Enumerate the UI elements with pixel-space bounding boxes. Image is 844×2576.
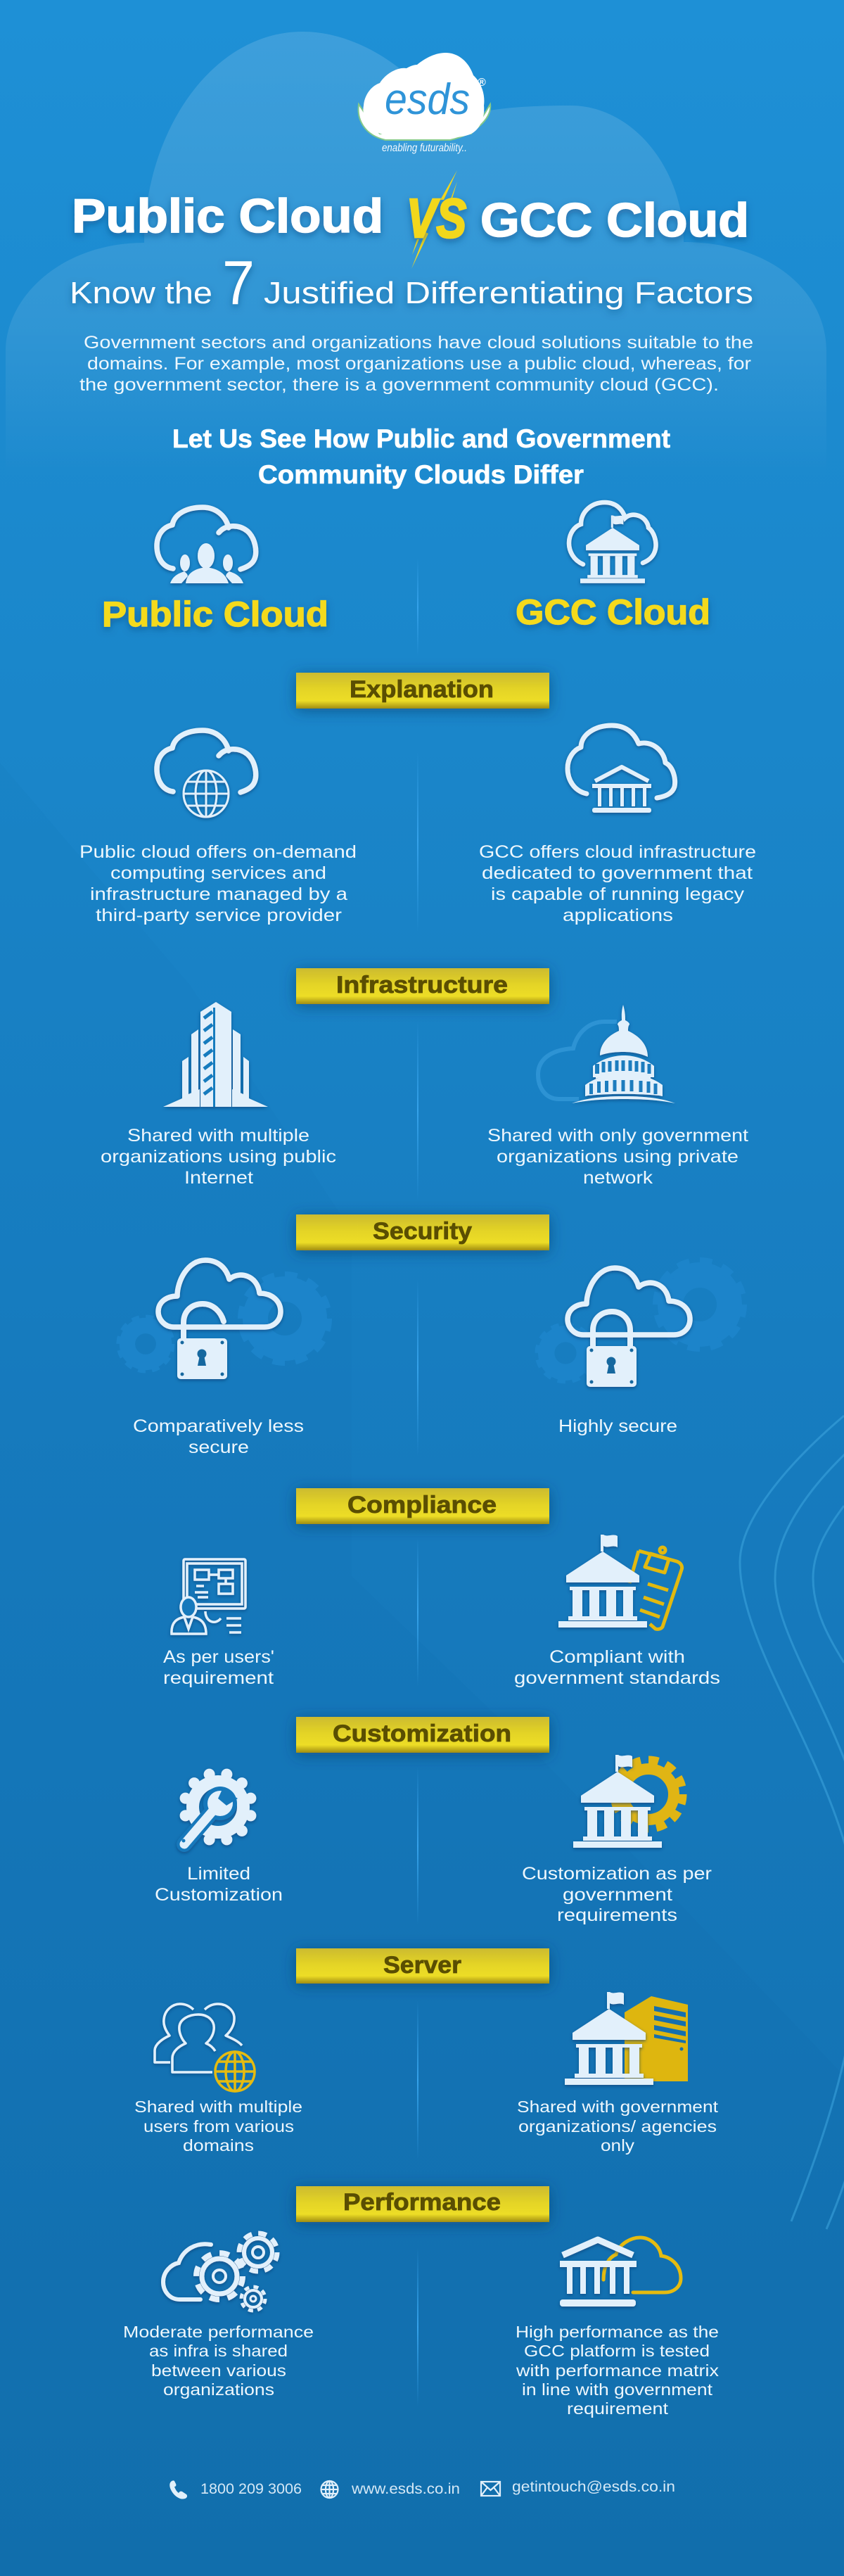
column: public cloud header [102,507,328,634]
banner: server [296,1948,549,1984]
text: public security: Comparatively less [133,1416,304,1436]
icon: VS lightning: VS [407,187,466,249]
text: gcc infrastructure: organizations using private [497,1147,738,1167]
center dividers [417,559,418,2406]
icon: VS lightning [407,170,466,269]
icon: cloud with closed padlock [568,1268,690,1387]
banner: security: Security [373,1218,472,1245]
text: public explanation: infrastructure managed by a [90,884,347,904]
text: public customization [155,1864,283,1905]
text: gcc performance: GCC platform is tested [524,2342,710,2360]
registered mark: ® [478,77,486,89]
text: public compliance: As per users' [163,1647,274,1667]
banner: performance [296,2186,549,2222]
text: gcc compliance [514,1647,720,1688]
text: public server [134,2098,302,2155]
logo [359,53,490,154]
logo hands [359,104,490,140]
panel: customization gcc [522,1755,712,1925]
icon: government building [558,1535,647,1628]
column: gcc cloud header [516,502,710,632]
icon: capitol [572,1005,675,1103]
banner: explanation: Explanation [350,676,494,703]
panel: security gcc [538,1262,742,1436]
text: gcc infrastructure [487,1126,748,1188]
panel: security public [120,1260,327,1457]
panel: server gcc [517,1992,719,2155]
text: public security: secure [188,1438,249,1457]
section heading: Let Us See How Public and Government [172,424,670,453]
icon: phone [170,2480,187,2499]
text: gcc explanation [479,842,756,925]
panel: infrastructure gcc [487,1005,748,1188]
banner: explanation [296,673,549,709]
text: gcc performance [516,2323,719,2418]
banner: performance: Performance [343,2189,501,2216]
intro paragraph: the government sector, there is a government community cloud (GCC). [79,375,719,395]
text: public infrastructure: organizations using public [101,1147,336,1167]
text: public performance: Moderate performance [123,2323,314,2341]
text: gcc performance: in line with government [522,2380,713,2399]
text: gcc explanation: dedicated to government that [482,863,753,883]
text: public security [133,1416,304,1457]
panel: compliance public [163,1559,274,1688]
icon: yellow server box [625,1996,688,2081]
text: gcc explanation: GCC offers cloud infrastructure [479,842,756,862]
text: gcc infrastructure: Shared with only government [487,1126,748,1146]
text: gcc compliance: government standards [514,1668,720,1688]
section heading: Community Clouds Differ [258,460,584,489]
text: public explanation: third-party service provider [96,906,342,925]
icon: cloud with gears [163,2233,277,2311]
banner: infrastructure [296,968,549,1004]
text: gcc security: Highly secure [558,1416,677,1436]
intro paragraph [79,333,753,395]
panel: customization public [155,1769,283,1905]
text: gcc customization: Customization as per [522,1864,712,1884]
panel: performance gcc [516,2238,719,2418]
icon: clipboard [629,1547,682,1629]
logo tagline: enabling futurability.. [382,142,467,154]
intro paragraph: domains. For example, most organizations use a public cloud, whereas, for [87,354,751,374]
text: gcc customization: government [563,1885,672,1905]
background decorative curves [740,1416,844,2229]
icon: user with board [172,1559,245,1634]
subtitle: know the: Know the [70,276,212,310]
icon: yellow gear [615,1760,682,1828]
title [72,170,749,269]
text: public explanation [79,842,357,925]
text: public infrastructure: Internet [184,1168,253,1188]
icon: government building [573,1755,662,1848]
text: gcc server: Shared with government [517,2098,719,2116]
panel: compliance gcc [514,1535,720,1688]
text: public infrastructure: Shared with multiple [127,1126,309,1146]
icon: cloud with building outline [568,725,675,813]
icon: faint cloud [538,1022,617,1099]
icon: yellow cloud [603,2238,681,2292]
text: public performance: organizations [163,2380,274,2399]
logo cloud [363,53,484,139]
banner: compliance [296,1488,549,1524]
text: public customization: Limited [187,1864,250,1884]
text: website: www.esds.co.in [351,2481,460,2497]
panel: explanation gcc [479,725,756,925]
logo wordmark: esds [385,75,470,124]
text: public explanation: computing services and [110,863,326,883]
subtitle [70,248,753,317]
icon: cloud with globe [157,730,256,817]
icon: cloud with people [157,507,256,583]
text: gcc server [517,2098,719,2155]
background cloud shape [6,32,826,478]
text: public compliance [163,1647,274,1688]
panel: infrastructure public [101,1002,336,1188]
text: email: getintouch@esds.co.in [512,2479,675,2495]
text: gcc server: organizations/ agencies [518,2117,717,2136]
text: gcc customization: requirements [557,1905,677,1925]
banner: customization: Customization [333,1720,511,1747]
title: GCC Cloud: GCC Cloud [480,193,749,247]
banner: infrastructure: Infrastructure [336,972,508,998]
banner: compliance: Compliance [347,1492,497,1518]
text: public compliance: requirement [163,1668,274,1688]
banner: security [296,1214,549,1250]
banner: server: Server [383,1952,461,1979]
icon: gear with wrench [180,1769,256,1845]
text: public performance: between various [151,2361,286,2380]
text: public server: users from various [143,2117,294,2136]
text: public performance [123,2323,314,2399]
subtitle: factors: Justified Differentiating Factors [264,276,753,310]
text: public infrastructure [101,1126,336,1188]
icon: government building [565,1992,653,2085]
icon: building outline [560,2240,637,2307]
text: public performance: as infra is shared [149,2342,288,2360]
text: gcc compliance: Compliant with [549,1647,685,1667]
icon: mail [481,2482,500,2496]
panel: explanation public [79,730,357,925]
heading: public cloud: Public Cloud [102,595,328,634]
panel: server public [134,2004,302,2155]
icon: globe [321,2481,338,2498]
text: gcc infrastructure: network [583,1168,653,1188]
intro paragraph: Government sectors and organizations have cloud solutions suitable to the [84,333,753,353]
icon: faint gears [538,1262,742,1381]
heading: gcc cloud: GCC Cloud [516,592,710,632]
text: public server: Shared with multiple [134,2098,302,2116]
title: Public Cloud: Public Cloud [72,189,383,243]
text: gcc customization [522,1864,712,1925]
background diagonal shade [0,763,844,2576]
text: public server: domains [183,2136,254,2155]
subtitle: seven: 7 [222,248,255,317]
icon: faint gears [120,1276,327,1370]
footer contacts [170,2479,675,2499]
text: public explanation: Public cloud offers on-demand [79,842,357,862]
icon: skyscraper [163,1002,268,1107]
text: gcc server: only [601,2136,634,2155]
text: gcc performance: with performance matrix [516,2361,719,2380]
icon: cloud with open padlock [158,1260,281,1379]
icon: users with globe [155,2004,255,2091]
text: gcc explanation: applications [563,906,673,925]
section heading [172,424,670,489]
banner: customization [296,1717,549,1753]
panel: performance public [123,2233,314,2399]
text: gcc performance: requirement [567,2399,669,2418]
text: gcc performance: High performance as the [516,2323,719,2341]
text: public customization: Customization [155,1885,283,1905]
text: gcc explanation: is capable of running legacy [491,884,745,904]
text: phone number: 1800 209 3006 [200,2481,302,2497]
icon: cloud with government building [569,502,656,583]
